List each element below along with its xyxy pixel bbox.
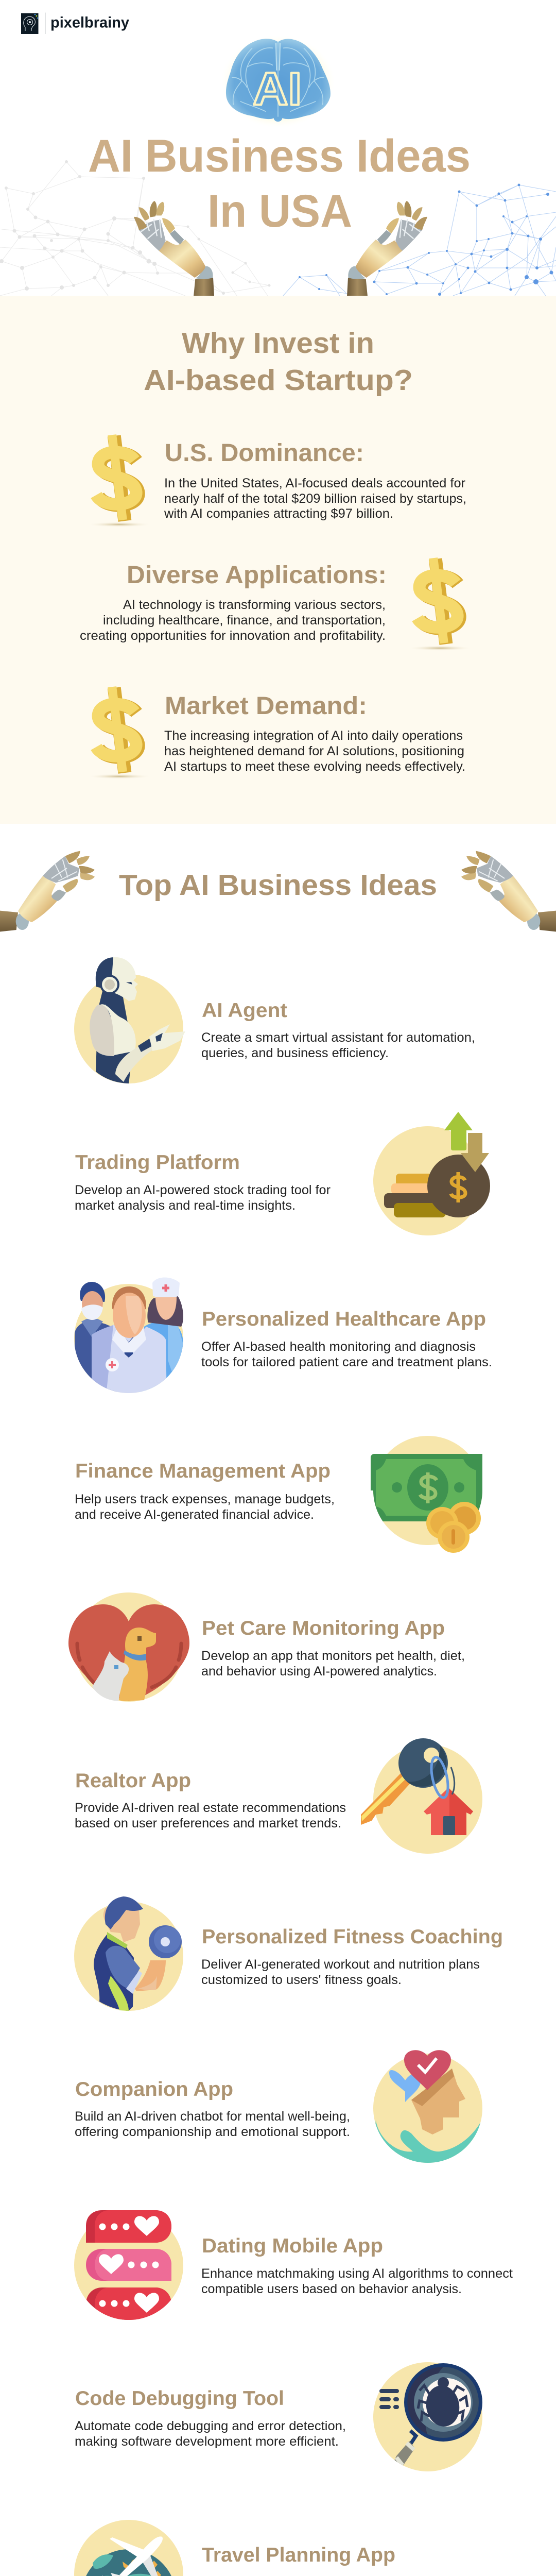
text: The increasing integration of AI into daily operations [164,728,463,743]
heading: Personalized Fitness Coaching [202,1926,503,1948]
text [75,2419,346,2449]
text: Build an AI-driven chatbot for mental well-being, [75,2109,350,2124]
icon: gold dollar [88,686,151,779]
text: market analysis and real-time insights. [75,1198,296,1213]
card: Pet Care Monitoring App [68,1592,465,1702]
heading: Travel Planning App [202,2544,395,2566]
text: creating opportunities for innovation and profitability. [80,629,386,643]
text: Develop an app that monitors pet health, diet, [201,1649,465,1663]
background network: grey [0,160,271,296]
text [201,1957,480,1987]
text: Deliver AI-generated workout and nutrition plans [201,1957,480,1972]
text [75,1492,335,1522]
text: and behavior using AI-powered analytics. [201,1664,437,1679]
card: Finance Management App [75,1436,489,1553]
heading: Companion App [75,2078,233,2100]
icon: money bag and arrows [373,1112,490,1235]
icon: medical team [74,1277,183,1401]
heading: Personalized Healthcare App [202,1308,486,1330]
heading: Trading Platform [75,1151,240,1174]
card: Personalized Fitness Coaching [74,1896,503,2011]
text: Provide AI-driven real estate recommendations [75,1801,346,1815]
text: nearly half of the total $209 billion raised by startups, [164,492,466,506]
panel: why invest [0,296,556,824]
card: Personalized Healthcare App [74,1277,492,1401]
text [80,598,386,643]
icon: magnifier with bug [373,2362,482,2478]
text: Enhance matchmaking using AI algorithms to connect [201,2266,513,2281]
heading: top AI business ideas: Top AI Business Ideas [119,869,437,902]
icon: key and house [361,1738,482,1854]
text: based on user preferences and market trends. [75,1816,341,1831]
heading: Market Demand: [165,692,367,720]
icon: AI brain: AI [253,63,302,115]
icon: AI brain [221,35,335,128]
block: market demand [88,686,465,779]
card: AI Agent [74,957,475,1083]
block: diverse applications [80,557,472,651]
text: has heightened demand for AI solutions, positioning [164,744,464,758]
card: Companion App [75,2050,482,2163]
logo [21,12,129,34]
text: AI startups to meet these evolving needs effectively. [164,759,465,774]
heading: Finance Management App [75,1460,331,1482]
text: Automate code debugging and error detection, [75,2419,346,2433]
icon: robot hand left [134,201,214,296]
icon: robot [74,957,185,1083]
text: customized to users' fitness goals. [201,1973,402,1987]
heading: Dating Mobile App [202,2235,383,2257]
title [88,130,471,236]
heading: Diverse Applications: [127,562,387,589]
text: offering companionship and emotional support. [75,2125,350,2139]
text: tools for tailored patient care and treatment plans. [201,1355,492,1369]
text [201,1649,465,1679]
logo mark [21,13,38,34]
text: making software development more efficient. [75,2434,339,2449]
text: including healthcare, finance, and transportation, [103,613,386,628]
text [201,1340,492,1369]
text [75,1183,331,1213]
heading: AI Agent [202,999,287,1022]
heading: why invest: AI-based Startup? [144,364,413,397]
icon: robot hand right [461,851,556,931]
icon: banknote and coins [371,1436,489,1553]
card: Realtor App [75,1738,482,1854]
text: compatible users based on behavior analysis. [201,2282,462,2296]
icon: robot hand right [347,201,427,296]
heading: why invest [144,327,413,397]
card: Dating Mobile App [74,2210,513,2324]
text [75,1801,346,1831]
heading: Pet Care Monitoring App [202,1617,445,1639]
text [164,476,466,521]
title: In USA [207,185,352,236]
block: U.S. dominance [88,434,466,527]
heading: U.S. Dominance: [165,439,364,467]
text: Help users track expenses, manage budgets, [75,1492,335,1506]
icon: gold dollar [408,557,472,651]
text [164,728,465,774]
background network: blue [283,183,556,296]
text [201,1030,475,1060]
text [201,2266,513,2296]
title: AI Business Ideas [88,130,471,181]
text: Create a smart virtual assistant for automation, [201,1030,475,1045]
card: Code Debugging Tool [75,2362,482,2478]
icon: head with hearts [373,2050,482,2163]
logo wordmark: pixelbrainy [50,14,129,31]
card: Trading Platform [75,1112,490,1235]
icon: globe with plane [74,2520,183,2576]
text: In the United States, AI-focused deals accounted for [164,476,465,490]
heading: Code Debugging Tool [75,2387,284,2410]
heading: Realtor App [75,1770,191,1792]
text: and receive AI-generated financial advice. [75,1507,314,1522]
icon: heart with pets [68,1592,189,1702]
text: AI technology is transforming various sectors, [123,598,386,612]
text: Develop an AI-powered stock trading tool for [75,1183,331,1197]
text: with AI companies attracting $97 billion. [164,506,393,521]
text: Offer AI-based health monitoring and diagnosis [201,1340,476,1354]
text: queries, and business efficiency. [201,1046,389,1060]
icon: robot hand left [0,851,95,931]
icon: heart chat bubbles [74,2210,183,2324]
card: Travel Planning App [74,2520,394,2576]
text [75,2109,350,2139]
icon: gold dollar [88,434,151,527]
icon: man with dumbbell [74,1896,183,2011]
heading: why invest: Why Invest in [182,327,374,360]
